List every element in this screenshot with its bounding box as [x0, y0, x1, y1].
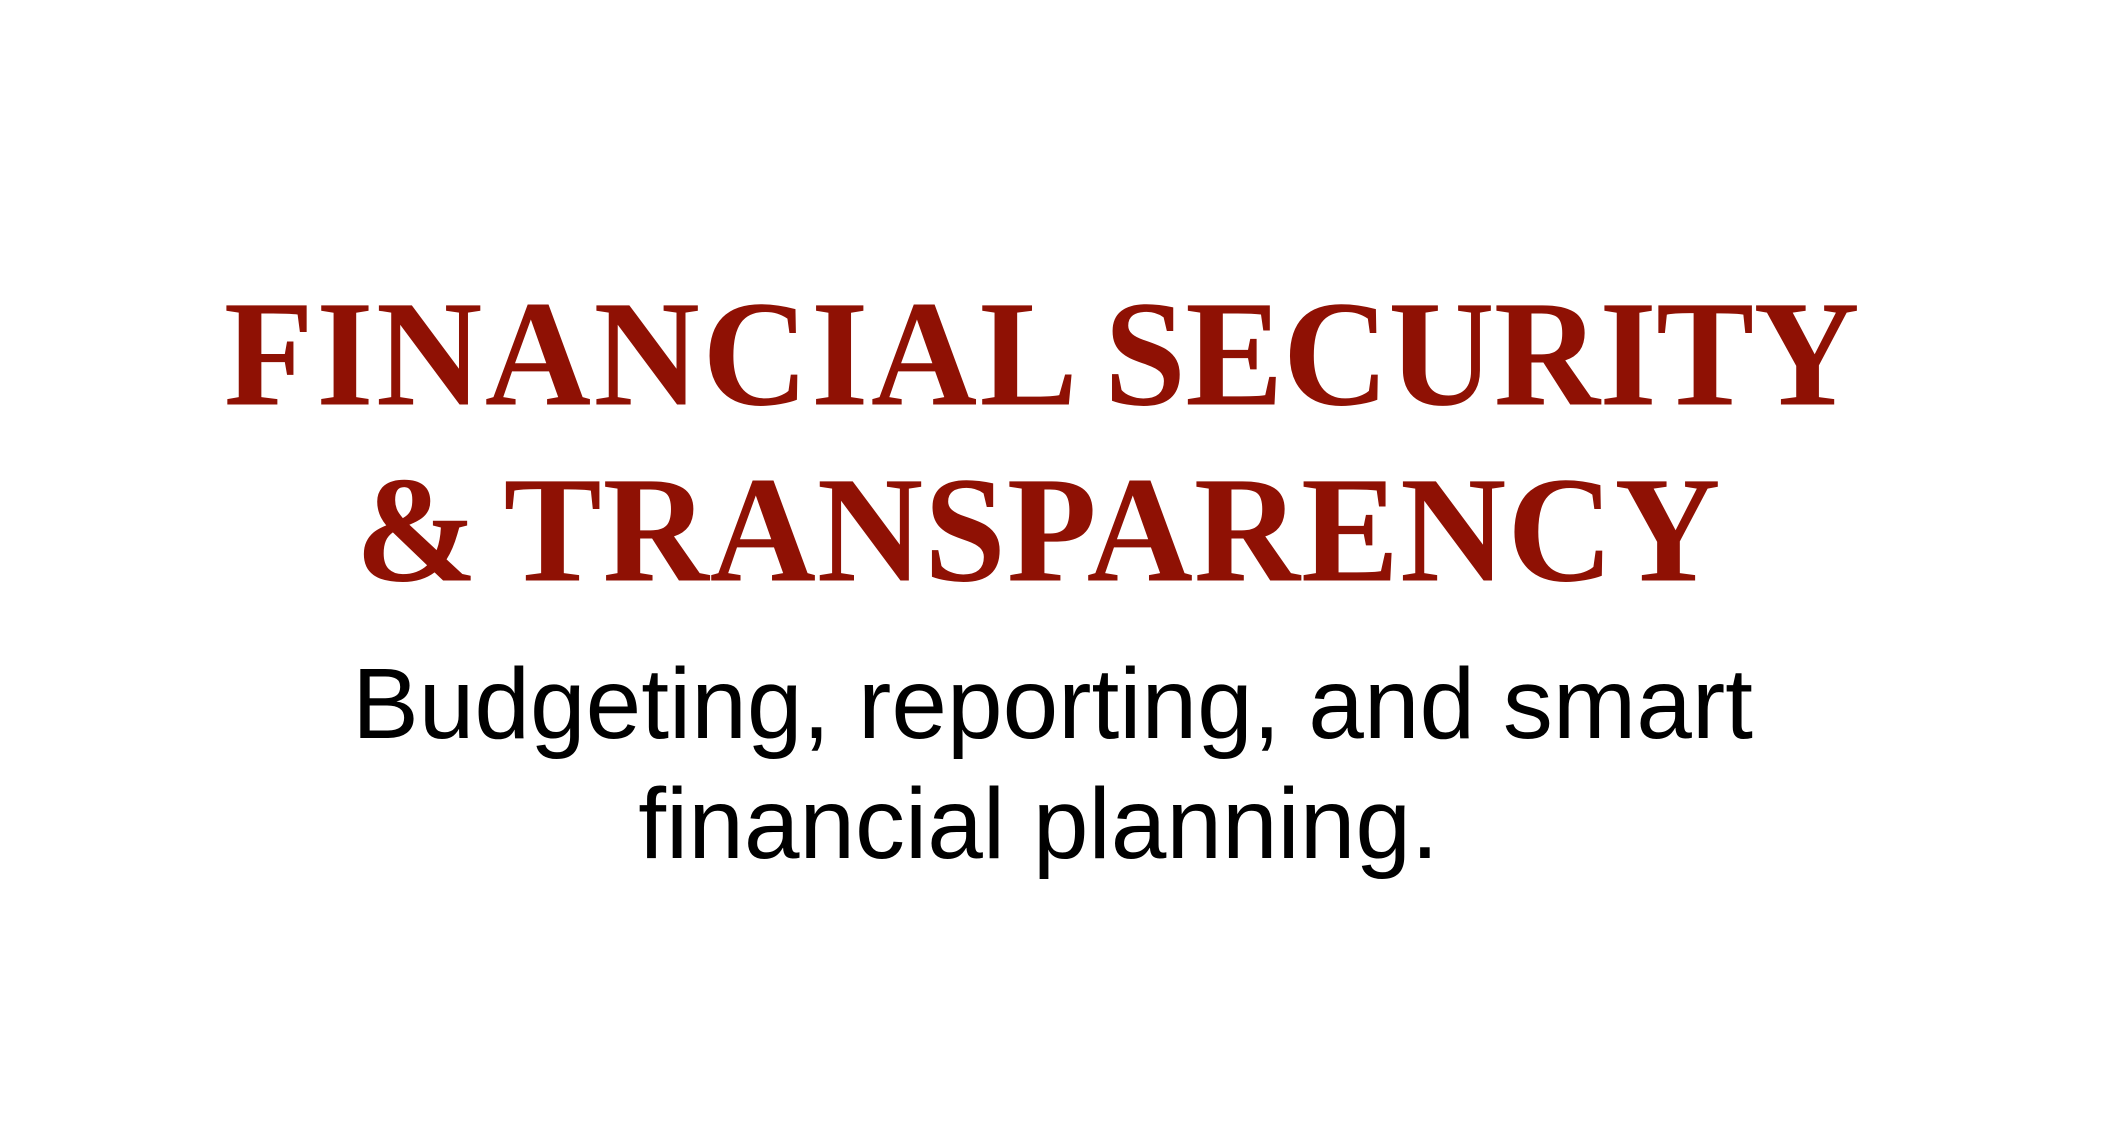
subtitle: Budgeting, reporting, and smart — [352, 648, 1753, 760]
subtitle — [352, 648, 1753, 880]
title: & TRANSPARENCY — [355, 446, 1722, 613]
subtitle: financial planning. — [638, 768, 1439, 880]
title — [224, 270, 1859, 613]
title: FINANCIAL SECURITY — [224, 270, 1859, 437]
